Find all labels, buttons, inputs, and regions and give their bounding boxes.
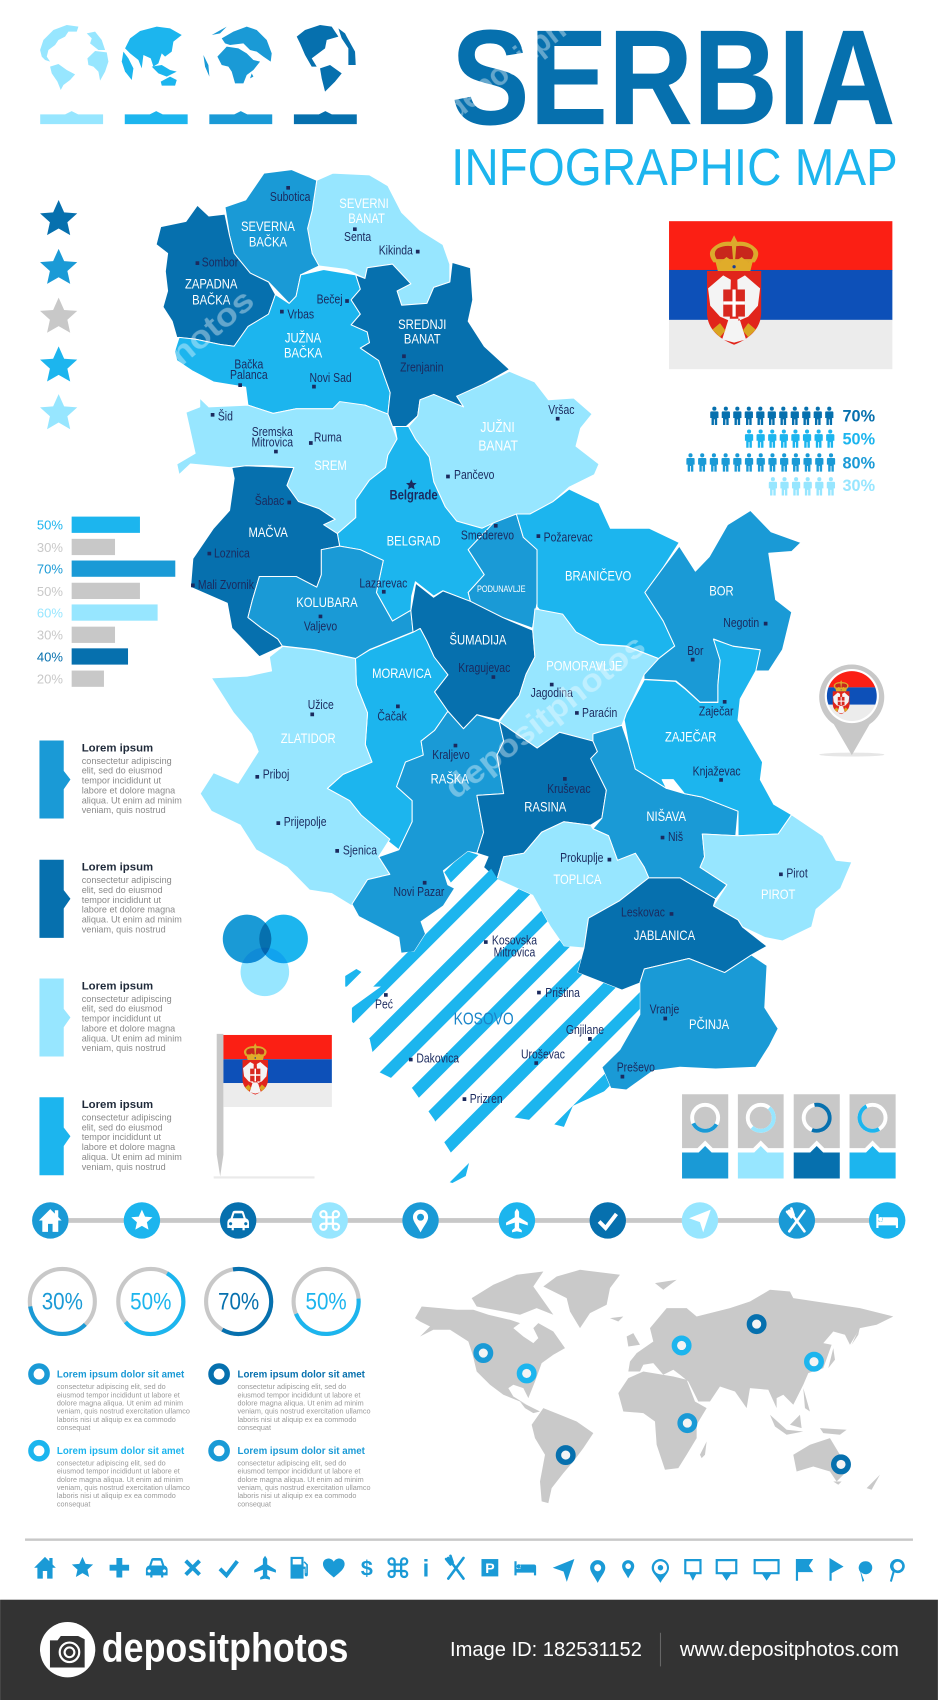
region name labels: KOLUBARA [296, 594, 358, 610]
city labels: Pančevo [454, 468, 495, 483]
icon: pin [590, 1560, 605, 1583]
city labels: Loznica [214, 547, 250, 561]
block 4: tempor incididunt ut [82, 1132, 162, 1142]
item 4: consectetur adipiscing elit, sed do [238, 1458, 346, 1467]
region name labels: BAČKA [284, 344, 323, 361]
region name labels: KOSOVO [454, 1010, 514, 1029]
side text blocks [39, 740, 182, 1175]
region: Rasina [477, 722, 606, 880]
block 2: Lorem ipsum [82, 862, 153, 874]
subtitle: INFOGRAPHIC MAP [451, 139, 898, 197]
icon: home [34, 1557, 56, 1579]
city labels: Kosovska [492, 934, 537, 948]
item 1: consequat [57, 1423, 90, 1432]
item 1 [31, 1366, 190, 1432]
icon: cross [184, 1559, 201, 1576]
horizontal bar chart: 50% [37, 584, 63, 599]
region name labels: POMORAVLJE [546, 657, 622, 674]
horizontal bar chart: 40% [37, 649, 63, 664]
city labels: Smederevo [461, 528, 514, 543]
city labels: Mitrovica [251, 436, 293, 450]
globe base bars [40, 111, 357, 124]
website url: www.depositphotos.com [679, 1638, 899, 1661]
region: Raska [352, 711, 504, 953]
horizontal bar chart: 70% [37, 562, 63, 577]
region: Pirot [700, 815, 852, 941]
city labels: Šid [218, 409, 233, 424]
icon: info: i [423, 1555, 429, 1582]
icon: cutlery [779, 1202, 815, 1239]
city labels: Priboj [263, 767, 289, 782]
icon: fuel [291, 1557, 308, 1579]
globe: africa view [203, 27, 272, 83]
block 3: aliqua. Ut enim ad minim [82, 1033, 182, 1043]
map regions south [200, 583, 852, 1090]
icon: parking: P [485, 1560, 495, 1576]
item 2 [211, 1366, 371, 1432]
city labels: Priština [545, 986, 580, 1000]
progress tiles [682, 1094, 896, 1179]
block 2: aliqua. Ut enim ad minim [82, 915, 182, 925]
city labels: Užice [308, 698, 334, 712]
lorem text list [31, 1366, 371, 1508]
icon: plus [110, 1558, 129, 1577]
region: Kolubara [248, 546, 413, 659]
city labels: Valjevo [304, 619, 338, 634]
region: Jablanica [577, 878, 767, 990]
icon: car [146, 1558, 168, 1577]
city labels: Mitrovica [494, 946, 536, 960]
people row 80%: 80% [843, 454, 876, 472]
region: Podunavlje [468, 514, 537, 628]
region name labels: BOR [709, 583, 734, 599]
donut charts [16, 1255, 361, 1347]
region name labels: SEVERNI [339, 195, 389, 211]
item 4: veniam, quis nostrud exercitation ullamco [238, 1483, 371, 1492]
donut 70%: 70% [218, 1289, 259, 1316]
icon: callout medium [716, 1559, 737, 1581]
city labels: Vrbas [287, 307, 314, 322]
city labels: Novi Sad [309, 371, 352, 385]
block 1: Lorem ipsum [82, 742, 153, 754]
region: Juzna Backa [174, 270, 390, 414]
region: Bor [644, 510, 801, 702]
city labels: Negotin [723, 616, 759, 630]
item 3: eiusmod tempor incididunt ut labore et [57, 1467, 180, 1476]
world map [415, 1270, 893, 1503]
region name labels: BANAT [348, 210, 385, 226]
region name labels: PČINJA [689, 1016, 730, 1032]
icon: callout square [684, 1559, 702, 1581]
small flag on pole [214, 1034, 332, 1179]
region: Severni Banat [308, 173, 450, 305]
region name labels: ZAJEČAR [665, 728, 716, 745]
city labels: Vršac [548, 403, 575, 417]
item 2: eiusmod tempor incididunt ut labore et [238, 1390, 360, 1399]
region: Branicevo [516, 489, 679, 659]
tile 2 [738, 1094, 784, 1179]
icon: small pin [622, 1560, 634, 1578]
block 3: labore et dolore magna [82, 1023, 176, 1033]
icon: flag [796, 1559, 813, 1581]
watermarks: depositphotos [438, 627, 652, 806]
people row 30%: 30% [843, 477, 876, 495]
icon: star [72, 1557, 93, 1577]
map of Serbia [156, 170, 852, 1183]
icon: command [389, 1558, 407, 1577]
donut 70% [201, 1264, 276, 1339]
icon: plane [499, 1202, 535, 1239]
region name labels: PODUNAVLJE [477, 583, 526, 594]
icon: heart [323, 1559, 345, 1577]
horizontal bar chart [37, 517, 175, 687]
logo mark [40, 1622, 95, 1677]
city labels: Pirot [786, 866, 808, 881]
city labels: Lazarevac [359, 576, 407, 591]
region name labels: BANAT [478, 437, 518, 454]
city labels: Leskovac [621, 906, 665, 920]
region: Belgrad [337, 427, 493, 621]
city labels: Palanca [230, 368, 268, 383]
item 4: laboris nisi ut aliquip ex ea commodo [238, 1491, 356, 1500]
map regions north [156, 170, 801, 702]
globe: atlantic view [40, 25, 108, 90]
region name labels: RAŠKA [431, 770, 469, 787]
city labels: Niš [668, 830, 683, 845]
city labels: Bečej [317, 293, 343, 307]
city labels: Kruševac [547, 782, 591, 796]
icon: pin [402, 1202, 439, 1239]
item 3: laboris nisi ut aliquip ex ea commodo [57, 1491, 176, 1500]
footer bar [0, 1600, 938, 1700]
city labels: Dakovica [416, 1052, 459, 1066]
region: Pcinja [602, 955, 778, 1090]
icon: home [32, 1202, 69, 1239]
block 2: consectetur adipiscing [82, 875, 172, 885]
city labels: Čačak [377, 710, 407, 724]
region name labels: BANAT [404, 330, 441, 347]
block 4: Lorem ipsum [82, 1099, 153, 1111]
city labels: Kragujevac [458, 661, 510, 675]
icon: star [124, 1202, 160, 1239]
logo wordmark: depositphotos [102, 1625, 348, 1671]
flag of Serbia [669, 221, 892, 369]
block 3 [39, 978, 182, 1057]
region name labels: ZAPADNA [185, 275, 238, 292]
city labels [198, 190, 808, 1106]
block 3: tempor incididunt ut [82, 1014, 162, 1024]
city labels: Prizren [470, 1092, 503, 1106]
region name labels: JABLANICA [634, 927, 696, 943]
icon: command [311, 1202, 348, 1239]
icon: parking [481, 1559, 498, 1576]
city labels: Belgrade [389, 486, 438, 503]
block 4: aliqua. Ut enim ad minim [82, 1152, 182, 1162]
donut 50%: 50% [130, 1289, 171, 1316]
block 4: elit, sed do eiusmod [82, 1122, 163, 1132]
item 2: Lorem ipsum dolor sit amet [238, 1369, 365, 1380]
city labels: Preševo [617, 1061, 655, 1075]
icon: car [220, 1202, 256, 1239]
item 4: dolore magna aliqua. Ut enim ad minim [238, 1475, 364, 1484]
block 2: veniam, quis nostrud [82, 924, 166, 934]
image id: Image ID: 182531152 [450, 1638, 642, 1661]
item 3: consectetur adipiscing elit, sed do [57, 1458, 166, 1467]
horizontal bar chart: 30% [37, 540, 63, 555]
region name labels: JUŽNI [480, 418, 515, 435]
icon: bed [514, 1561, 536, 1575]
city labels: Senta [344, 230, 372, 244]
region name labels: BAČKA [192, 291, 231, 308]
block 1: elit, sed do eiusmod [82, 766, 163, 776]
city labels: Zaječar [699, 705, 734, 719]
city labels: Bačka [234, 358, 264, 372]
region name labels: SREM [314, 457, 347, 473]
icon: callout wide [754, 1559, 780, 1581]
people row 70% [710, 407, 876, 426]
region: Zlatibor [200, 646, 390, 906]
star rating column [40, 200, 77, 429]
block 1: consectetur adipiscing [82, 756, 172, 766]
region name labels: BELGRAD [387, 532, 441, 549]
item 3: dolore magna aliqua. Ut enim ad minim [57, 1475, 183, 1484]
region: Moravica [327, 628, 448, 850]
region name labels: SREDNJI [398, 316, 446, 332]
item 2: consequat [238, 1423, 271, 1432]
region name labels: MAČVA [249, 524, 288, 541]
block 3: veniam, quis nostrud [82, 1043, 166, 1053]
item 2: consectetur adipiscing elit, sed do [238, 1382, 346, 1391]
region: Srem [177, 398, 397, 534]
block 3: elit, sed do eiusmod [82, 1004, 163, 1014]
block 1: aliqua. Ut enim ad minim [82, 795, 182, 805]
item 1: consectetur adipiscing elit, sed do [57, 1382, 166, 1391]
people row 50% [745, 429, 876, 449]
city labels: Sjenica [343, 844, 377, 858]
icon: plane [254, 1556, 276, 1580]
people row 50%: 50% [843, 431, 876, 449]
city labels: Peć [375, 997, 393, 1012]
capital star marker [406, 479, 417, 489]
item 4 [211, 1443, 371, 1508]
icon timeline [32, 1202, 905, 1239]
block 1: tempor incididunt ut [82, 776, 162, 786]
region name labels: ŠUMADIJA [449, 631, 507, 648]
globe: americas view [297, 25, 356, 92]
block 2: labore et dolore magna [82, 905, 176, 915]
block 4 [39, 1097, 182, 1175]
city markers [191, 186, 783, 1101]
donut 50% [291, 1266, 361, 1337]
horizontal bar chart: 60% [37, 605, 63, 620]
region: Sumadija [411, 583, 535, 729]
horizontal bar chart: 30% [37, 628, 63, 643]
region name labels: SEVERNA [241, 218, 295, 234]
horizontal bar chart: 50% [37, 518, 63, 533]
item 1: dolore magna aliqua. Ut enim ad minim [57, 1398, 183, 1407]
region: Toplica [497, 822, 649, 948]
block 4: veniam, quis nostrud [82, 1162, 166, 1172]
city labels: Paraćin [582, 706, 617, 720]
donut 30% [16, 1255, 108, 1347]
item 1: Lorem ipsum dolor sit amet [57, 1369, 185, 1380]
block 2 [39, 860, 182, 938]
item 1: eiusmod tempor incididunt ut labore et [57, 1390, 180, 1399]
block 1: veniam, quis nostrud [82, 805, 166, 815]
item 1: veniam, quis nostrud exercitation ullamco [57, 1407, 190, 1416]
city labels: Subotica [270, 190, 311, 204]
block 3: Lorem ipsum [82, 980, 153, 992]
horizontal bar chart: 20% [37, 672, 63, 687]
city labels: Sremska [252, 425, 293, 439]
bottom icon row [34, 1555, 905, 1583]
region name labels: JUŽNA [285, 329, 322, 346]
region name labels: ZLATIDOR [281, 730, 336, 746]
city labels: Požarevac [544, 530, 593, 545]
region: Srednji Banat [351, 262, 510, 427]
tile 1 [682, 1094, 728, 1179]
city labels: Šabac [255, 494, 284, 509]
people pictogram chart [686, 407, 876, 495]
region: Macva [191, 466, 340, 657]
block 4: consectetur adipiscing [82, 1113, 172, 1123]
region name labels: PIROT [761, 886, 796, 902]
watermarks: depositphotos [47, 282, 261, 469]
region: Nisava [591, 725, 738, 899]
item 4: eiusmod tempor incididunt ut labore et [238, 1467, 360, 1476]
icon: send [682, 1202, 718, 1239]
item 2: laboris nisi ut aliquip ex ea commodo [238, 1415, 356, 1424]
item 3: consequat [57, 1499, 90, 1508]
city labels: Jagodina [531, 686, 573, 701]
city labels: Kikinda [379, 244, 413, 258]
city labels: Zrenjanin [400, 360, 444, 375]
item 3 [31, 1443, 190, 1508]
block 2: elit, sed do eiusmod [82, 885, 163, 895]
region name labels [185, 195, 796, 1032]
region: Severna Backa [225, 170, 319, 303]
block 1 [39, 740, 182, 819]
city labels: Kraljevo [432, 748, 470, 762]
icon: magnifier pin [890, 1559, 905, 1582]
map pins [476, 1317, 848, 1472]
donut 30%: 30% [42, 1289, 83, 1316]
icon: check [220, 1561, 237, 1575]
city labels: Uroševac [521, 1047, 565, 1062]
item 2: dolore magna aliqua. Ut enim ad minim [238, 1398, 364, 1407]
region: Zapadna Backa [156, 205, 275, 346]
city labels: Bor [687, 644, 704, 658]
globe: asia view [122, 27, 182, 86]
region name labels: MORAVICA [372, 665, 432, 681]
region name labels: BRANIČEVO [565, 567, 631, 584]
city labels: Prokuplje [560, 851, 604, 865]
icon: send [553, 1559, 574, 1582]
region name labels: RASINA [524, 798, 567, 815]
people row 80% [686, 453, 876, 472]
block 2: tempor incididunt ut [82, 895, 162, 905]
city labels: Prijepolje [284, 815, 327, 829]
item 4: Lorem ipsum dolor sit amet [238, 1446, 365, 1457]
city labels: Mali Zvornik [198, 578, 254, 592]
watermarks [47, 0, 652, 806]
block 4: labore et dolore magna [82, 1142, 176, 1152]
globes row [40, 25, 357, 124]
region name labels: NIŠAVA [646, 808, 686, 824]
item 1: laboris nisi ut aliquip ex ea commodo [57, 1415, 176, 1424]
icon: pointer [859, 1561, 872, 1582]
block 3: consectetur adipiscing [82, 994, 172, 1004]
item 3: veniam, quis nostrud exercitation ullamco [57, 1483, 190, 1492]
region name labels: TOPLICA [553, 871, 602, 887]
people row 30% [769, 477, 876, 495]
icon: dollar: $ [361, 1555, 373, 1580]
venn diagram [223, 915, 308, 996]
city labels: Knjaževac [693, 765, 741, 779]
item 2: veniam, quis nostrud exercitation ullamco [238, 1407, 371, 1416]
region: Juzni Banat [409, 371, 599, 528]
tile 4 [850, 1094, 896, 1179]
city labels: Ruma [314, 430, 342, 445]
item 3: Lorem ipsum dolor sit amet [57, 1446, 185, 1457]
city labels: Novi Pazar [393, 885, 444, 899]
icon: cutlery [446, 1556, 463, 1579]
tile 3 [794, 1094, 840, 1179]
item 4: consequat [238, 1499, 271, 1508]
region: Kosovo stripes [345, 852, 640, 1183]
location pin with flag [819, 665, 884, 757]
icon: bed [869, 1202, 905, 1239]
region name labels: BAČKA [249, 233, 287, 250]
icon: dot pin [652, 1559, 669, 1583]
city labels: Gnjilane [566, 1023, 604, 1037]
region: Zajecar [624, 639, 792, 836]
city labels: Sombor [202, 256, 238, 270]
icon: check [590, 1202, 626, 1239]
donut 50% [106, 1257, 195, 1346]
donut 50%: 50% [306, 1289, 347, 1316]
block 1: labore et dolore magna [82, 785, 176, 795]
city labels: Vranje [650, 1002, 680, 1017]
people row 70%: 70% [843, 408, 876, 426]
region: Pomoravlje [499, 609, 659, 748]
icon: pennant [829, 1558, 844, 1581]
